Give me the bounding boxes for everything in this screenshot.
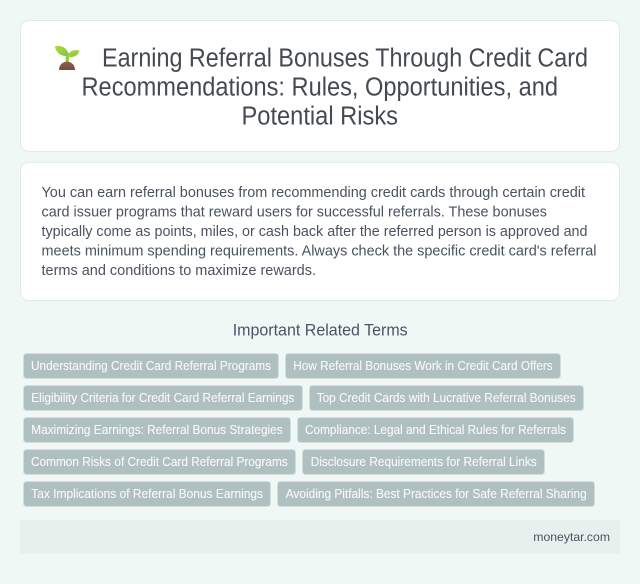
tag: Understanding Credit Card Referral Programs [31, 359, 271, 373]
title: Potential Risks [242, 102, 398, 130]
tag: Avoiding Pitfalls: Best Practices for Safe Referral Sharing [286, 487, 587, 501]
tag [310, 386, 584, 410]
text block: intro paragraph: typically come as points, miles, or cash back after the referred person is approved and [42, 224, 588, 240]
tag [302, 450, 544, 474]
text block: intro paragraph: terms and conditions to maximize rewards. [42, 263, 316, 279]
tag [24, 354, 278, 378]
tag: Top Credit Cards with Lucrative Referral Bonuses [317, 391, 576, 405]
tag: Compliance: Legal and Ethical Rules for Referrals [305, 423, 566, 437]
text block: intro paragraph [42, 185, 596, 279]
tag: Disclosure Requirements for Referral Links [311, 455, 537, 469]
title [82, 44, 588, 130]
tag list [24, 354, 594, 506]
tag [278, 482, 594, 506]
tag [24, 482, 270, 506]
tag: Common Risks of Credit Card Referral Programs [31, 455, 288, 469]
text block: intro paragraph: meets minimum spending requirements. Always check the specific credit card's referral [42, 244, 596, 260]
panel: title card [20, 20, 620, 152]
tag: Maximizing Earnings: Referral Bonus Strategies [31, 423, 283, 437]
tag [24, 418, 290, 442]
tag: Eligibility Criteria for Credit Card Referral Earnings [31, 391, 294, 405]
panel: intro text card [20, 162, 620, 300]
title: Recommendations: Rules, Opportunities, and [82, 74, 558, 102]
tag [286, 354, 560, 378]
footer [20, 520, 620, 554]
title: Earning Referral Bonuses Through Credit Card [102, 44, 588, 72]
icon: seedling [55, 46, 79, 70]
tag: How Referral Bonuses Work in Credit Card Offers [293, 359, 553, 373]
tag [24, 450, 296, 474]
tag: Tax Implications of Referral Bonus Earnings [31, 487, 263, 501]
heading: important related terms: Important Related Terms [233, 322, 408, 340]
text block: intro paragraph: You can earn referral bonuses from recommending credit cards through certain credit [42, 185, 585, 201]
tag [298, 418, 574, 442]
tag [24, 386, 302, 410]
footer source label: moneytar.com [533, 530, 610, 544]
text block: intro paragraph: card issuer programs that reward users for successful referrals. These bonuses [42, 204, 547, 220]
